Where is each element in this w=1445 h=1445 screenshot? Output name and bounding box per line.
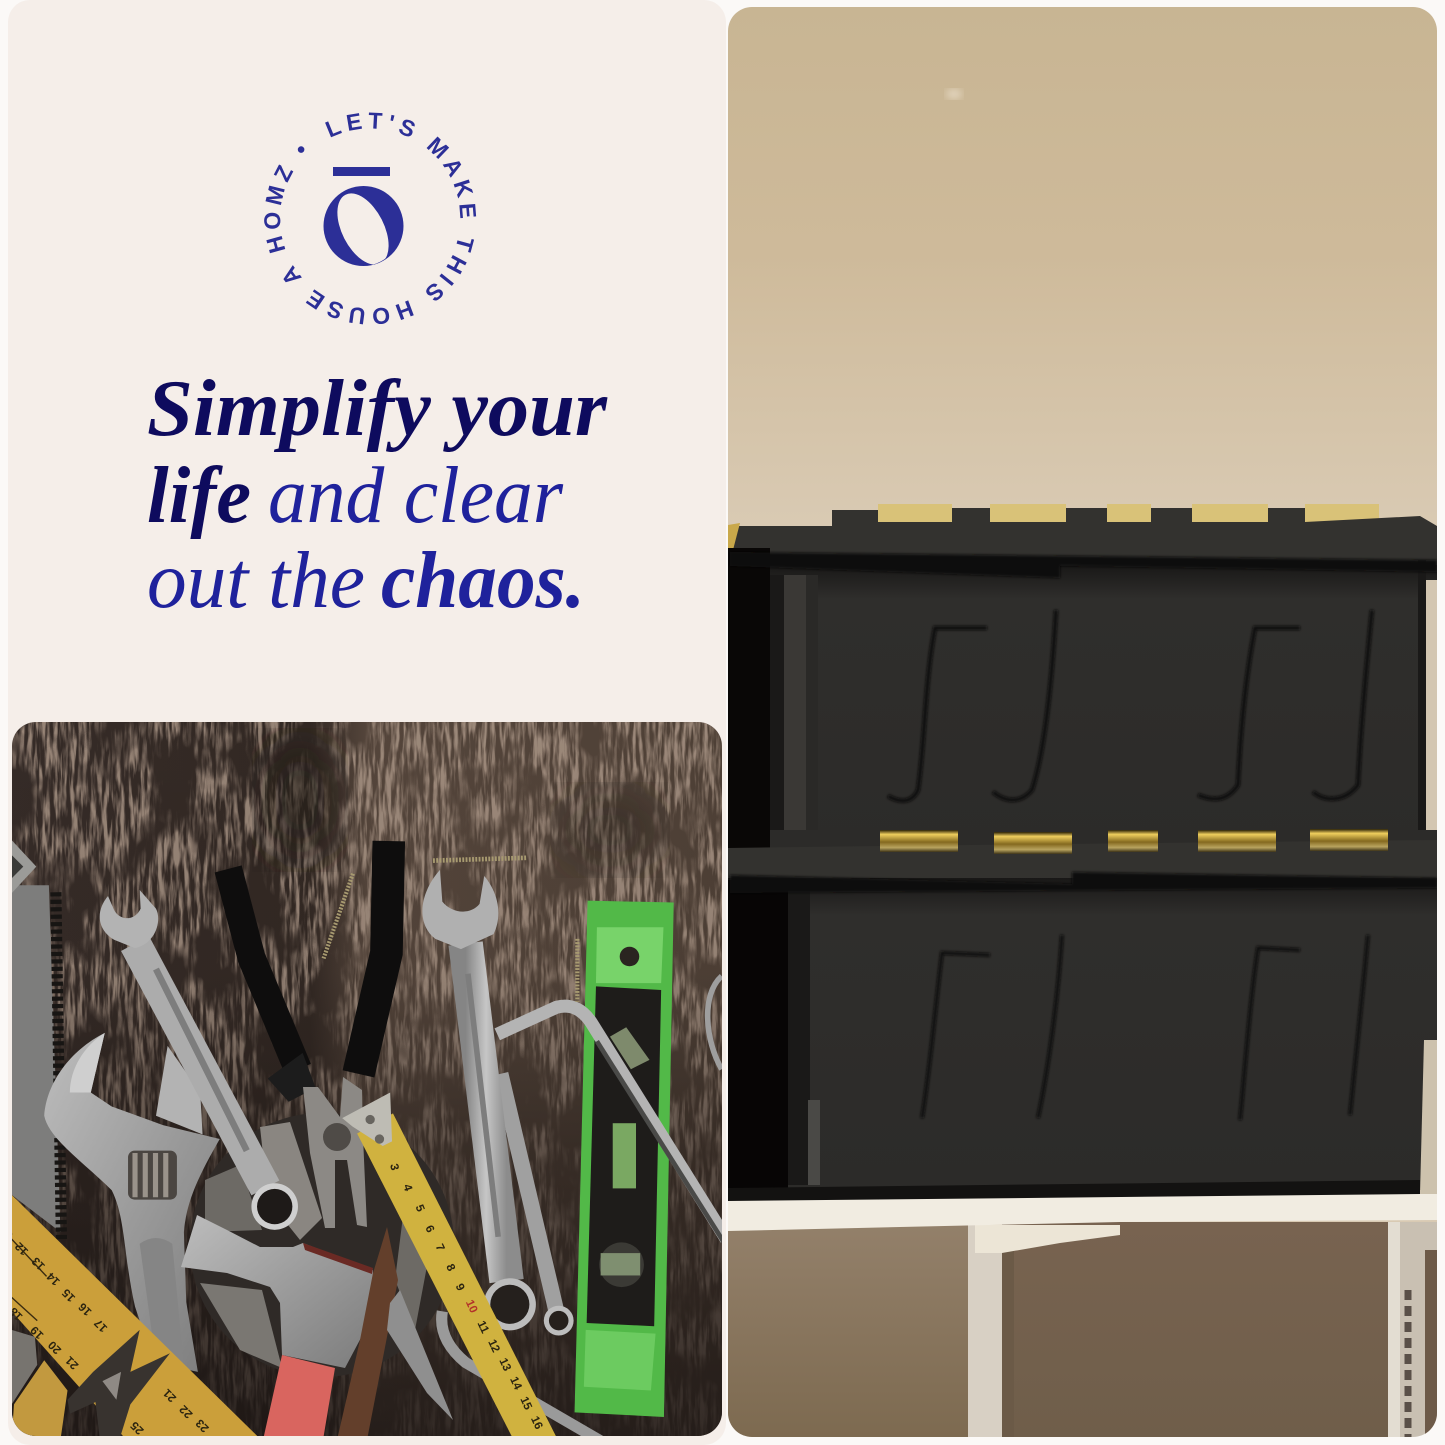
- key ring at right edge: [708, 976, 722, 1069]
- folding ruler: 13: [29, 1254, 48, 1273]
- tape measure: 4: [400, 1183, 415, 1193]
- tape measure: 14: [507, 1375, 525, 1392]
- lower bin gold tabs: [880, 829, 1388, 854]
- lower cabinet: [728, 1222, 1437, 1437]
- logo badge: [264, 112, 476, 324]
- headline: chaos.: [381, 537, 585, 625]
- folding ruler: 12: [13, 1240, 31, 1258]
- tape measure: 16: [528, 1414, 546, 1432]
- scissor blade: [387, 1290, 453, 1420]
- folding ruler: 18: [7, 1304, 25, 1323]
- tape measure: 11: [475, 1319, 492, 1336]
- panel: storage bins photo illustration: [728, 7, 1437, 1437]
- folding ruler: 17: [92, 1316, 110, 1335]
- lower bin lid: [728, 840, 1437, 888]
- gold glint on left lid corner: [728, 523, 740, 548]
- hammer head: [181, 1215, 373, 1368]
- upper bin yellow lid tabs: [878, 504, 1379, 522]
- hammer red sliver: [303, 1243, 373, 1274]
- lower storage bin: [728, 829, 1437, 1201]
- tape measure: 5: [413, 1203, 427, 1214]
- upper bin handle recess lines: [888, 610, 1372, 801]
- upper bin body: [728, 565, 1437, 850]
- circular saw blade: [190, 1113, 454, 1377]
- logo macron bar: [333, 167, 390, 176]
- bin base edge: [728, 1180, 1420, 1201]
- folding ruler: 16: [76, 1300, 94, 1318]
- upper bin lid: [734, 508, 1437, 565]
- tape measure: 9: [453, 1281, 467, 1293]
- tape measure: 7: [433, 1242, 447, 1253]
- headline: life: [147, 452, 251, 540]
- spirit level: [575, 901, 674, 1417]
- folding ruler: 25: [128, 1418, 146, 1437]
- pruning saw blade: [337, 1227, 398, 1440]
- upper bin lid shadow: [730, 552, 1437, 578]
- adjustable wrench: [44, 1033, 220, 1372]
- circular slogan text: LET'S MAKE THIS HOUSE A HOMZ •: [264, 112, 476, 324]
- wood background: [12, 722, 722, 1436]
- white shelf: [728, 1192, 1437, 1231]
- tape measure: [342, 1092, 559, 1442]
- wall background: [728, 7, 1437, 1237]
- folding ruler: 21: [63, 1353, 81, 1372]
- panel: tools photo illustration: [0, 722, 726, 1445]
- headline: and clear: [268, 452, 564, 540]
- wall speck: [946, 89, 962, 99]
- tape measure: 6: [422, 1223, 437, 1235]
- headline: [147, 365, 608, 625]
- upper bin dark side: [728, 548, 1437, 850]
- pliers: [228, 841, 389, 1228]
- tape measure: 12: [485, 1337, 502, 1355]
- tape measure: 13: [496, 1356, 514, 1374]
- logo letter o: [324, 185, 404, 273]
- headline: Simplify your: [147, 365, 608, 453]
- hex key: [497, 1006, 726, 1246]
- hammer: [181, 1215, 453, 1440]
- hammer handle: [263, 1355, 335, 1440]
- lower bin handle recess lines: [922, 935, 1368, 1120]
- screws: [324, 858, 577, 1002]
- lower bin lid shadow: [730, 872, 1437, 893]
- lower bin body: [728, 878, 1437, 1190]
- folding ruler: 19: [28, 1323, 46, 1342]
- small wrench behind: [501, 1074, 574, 1336]
- folding ruler: 22: [177, 1402, 195, 1421]
- yellow fragment and bracket bottom-left: [12, 1330, 68, 1439]
- folding ruler: 23: [193, 1416, 212, 1435]
- tape measure: 3: [387, 1163, 401, 1172]
- lower bin dark side: [728, 880, 820, 1200]
- headline: out the: [147, 537, 365, 625]
- folding ruler: 21: [160, 1386, 179, 1405]
- folding ruler: 14: [44, 1269, 63, 1288]
- combination wrench right: [422, 870, 536, 1330]
- folding ruler: [0, 1195, 263, 1442]
- spare hex key bottom: [442, 1311, 610, 1445]
- tape measure: 15: [517, 1395, 535, 1412]
- hand saw: [12, 840, 61, 1241]
- panel: cream brand panel: [8, 0, 726, 1445]
- combination wrench left: [100, 890, 298, 1230]
- tin snips: [68, 1330, 170, 1442]
- tape measure: 10: [463, 1298, 480, 1315]
- right wall strip beside lower bin: [1420, 1040, 1437, 1194]
- folding ruler: 20: [46, 1338, 64, 1357]
- upper storage bin: [728, 504, 1437, 850]
- folding ruler: 15: [59, 1286, 78, 1304]
- tape measure: 8: [443, 1262, 458, 1274]
